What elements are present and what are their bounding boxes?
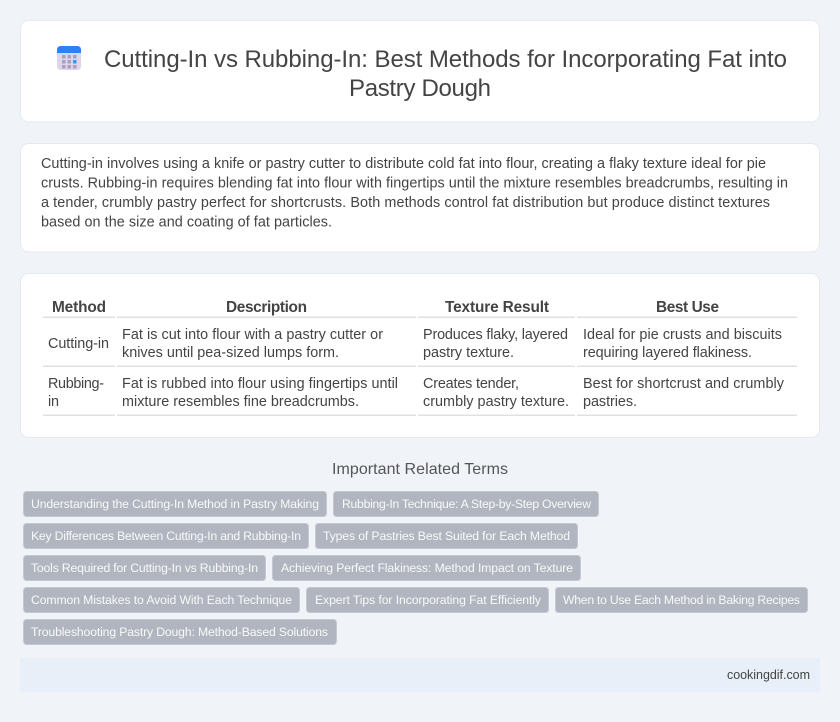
table row: cutting-in: requiring layered flakiness. <box>583 345 752 361</box>
heading: related terms: Important Related Terms <box>332 461 508 478</box>
table row: rubbing-in <box>48 376 785 410</box>
tag: Common Mistakes to Avoid With Each Technique <box>31 593 292 607</box>
tag: Expert Tips for Incorporating Fat Efficiently <box>315 593 542 607</box>
tag: Types of Pastries Best Suited for Each Method <box>323 529 570 543</box>
tag <box>306 588 548 612</box>
tag <box>556 588 808 612</box>
text block: introduction: crusts. Rubbing-in requires blending fat into flour with fingertips until the mixture resembles breadcrumbs, resulting in <box>41 176 788 192</box>
tag <box>24 620 336 644</box>
table row: rubbing-in: Rubbing- <box>48 376 104 392</box>
tag: Understanding the Cutting-In Method in Pastry Making <box>31 497 319 511</box>
tag: When to Use Each Method in Baking Recipes <box>563 593 800 607</box>
title: Cutting-In vs Rubbing-In: Best Methods for Incorporating Fat into <box>104 46 787 73</box>
table header: Best Use <box>656 299 719 316</box>
table row: cutting-in: knives until pea-sized lumps form. <box>122 345 339 361</box>
text block: introduction <box>41 156 788 230</box>
tag <box>272 556 580 580</box>
tag: Rubbing-In Technique: A Step-by-Step Overview <box>342 497 591 511</box>
tag <box>24 556 266 580</box>
table row: cutting-in: Cutting-in <box>48 336 109 352</box>
table header <box>52 299 719 316</box>
title <box>104 46 787 102</box>
table header: Method <box>52 299 106 316</box>
table header: Description <box>226 299 307 316</box>
tag: Achieving Perfect Flakiness: Method Impact on Texture <box>281 561 573 575</box>
panel: description <box>20 144 820 252</box>
panel: comparison table <box>20 274 820 438</box>
table row: rubbing-in: mixture resembles fine breadcrumbs. <box>122 394 359 410</box>
text block: introduction: Cutting-in involves using a knife or pastry cutter to distribute cold fat into flour, creating a flaky texture ideal for pie <box>41 156 766 172</box>
table row: cutting-in: Produces flaky, layered <box>423 327 568 343</box>
tag: Troubleshooting Pastry Dough: Method-Based Solutions <box>31 625 328 639</box>
tag <box>316 524 578 548</box>
title: Pastry Dough <box>349 75 491 102</box>
icon: calendar <box>57 46 81 70</box>
tag <box>24 492 326 516</box>
footer <box>20 658 820 692</box>
table row: cutting-in: Ideal for pie crusts and biscuits <box>583 327 782 343</box>
table row: rubbing-in: Fat is rubbed into flour using fingertips until <box>122 376 398 392</box>
tag: Key Differences Between Cutting-In and Rubbing-In <box>31 529 301 543</box>
table row: rubbing-in: crumbly pastry texture. <box>423 394 569 410</box>
table header: Texture Result <box>445 299 549 316</box>
text block: introduction: based on the size and coating of fat particles. <box>41 214 332 230</box>
tag <box>24 524 308 548</box>
table row: cutting-in: Fat is cut into flour with a pastry cutter or <box>122 327 383 343</box>
tag: Tools Required for Cutting-In vs Rubbing-In <box>31 561 258 575</box>
text block: introduction: a tender, crumbly pastry perfect for shortcrusts. Both methods control fat distribution but produce distinct textures <box>41 195 770 211</box>
table row: rubbing-in: in <box>48 394 59 410</box>
table row: cutting-in <box>48 327 782 361</box>
table row: rubbing-in: Best for shortcrust and crumbly <box>583 376 785 392</box>
table row: cutting-in: pastry texture. <box>423 345 514 361</box>
panel: related term tags <box>24 492 808 644</box>
table row: rubbing-in: Creates tender, <box>423 376 519 392</box>
tag <box>334 492 598 516</box>
table row: rubbing-in: pastries. <box>583 394 637 410</box>
tag <box>24 588 300 612</box>
header panel <box>20 20 820 122</box>
footer: cookingdif.com <box>727 668 810 682</box>
